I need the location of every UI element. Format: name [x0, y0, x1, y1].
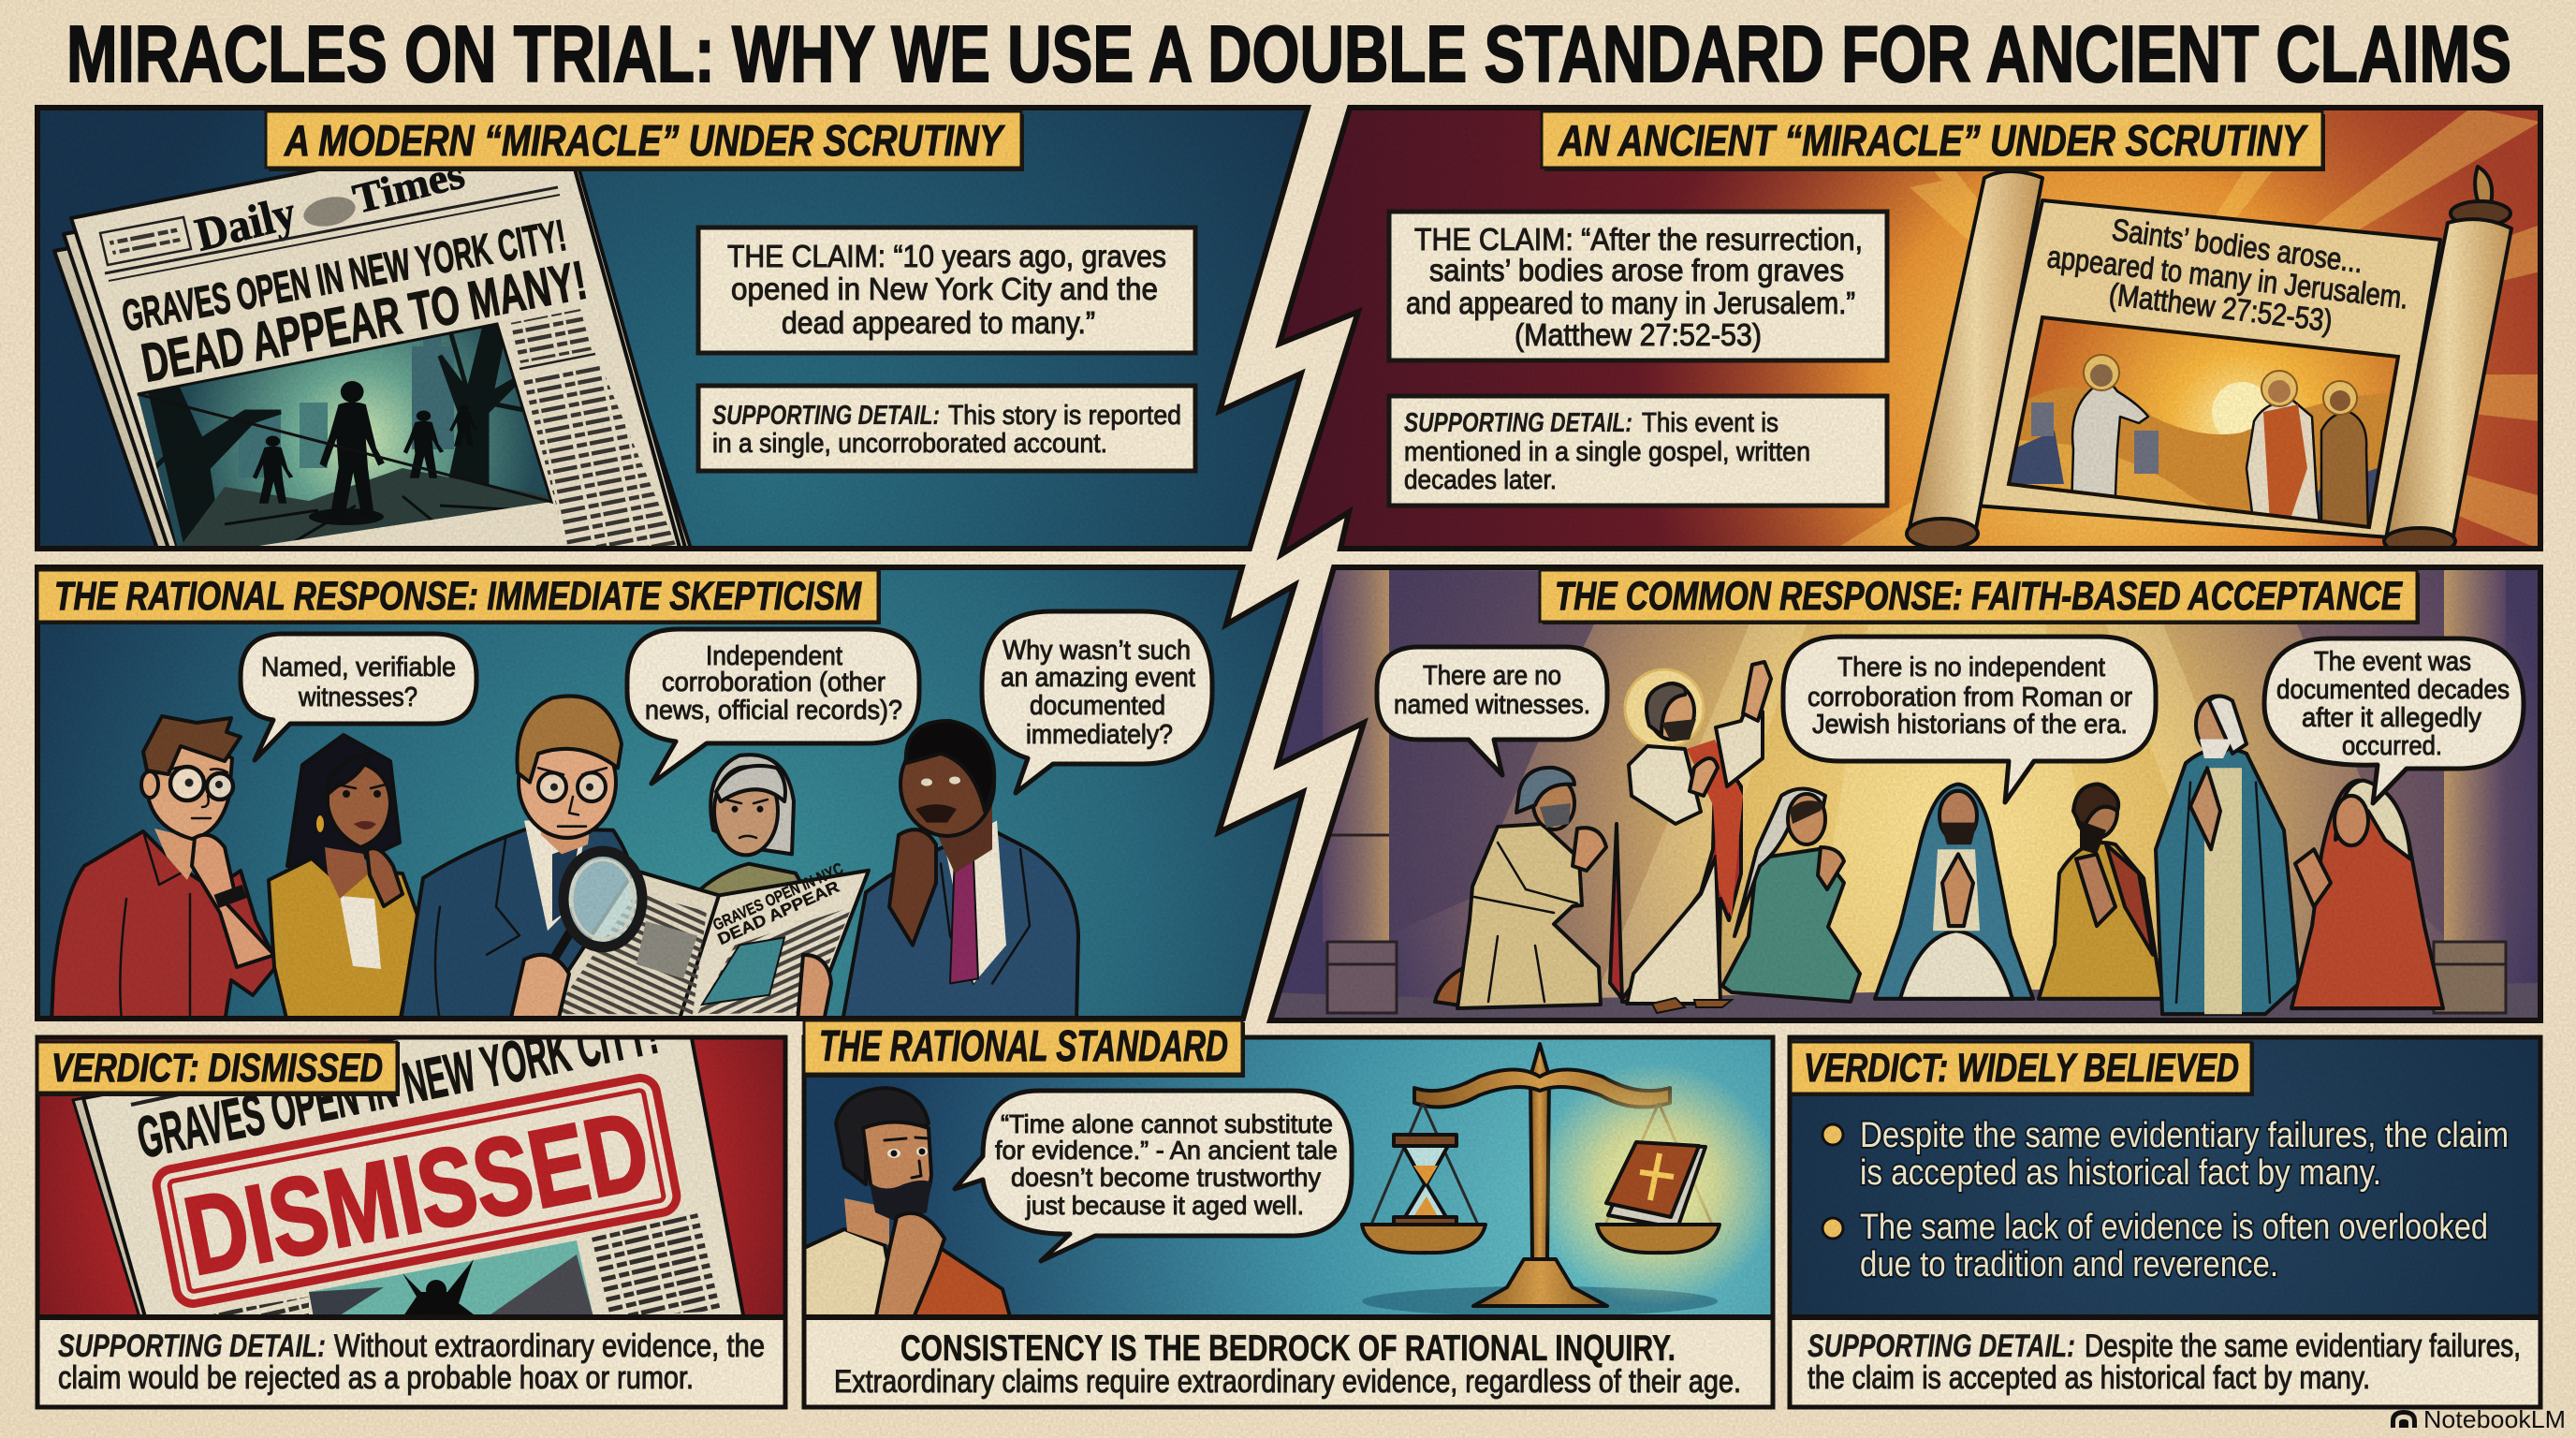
person: man in red shirt	[51, 716, 278, 1022]
heading: widely believed: VERDICT: WIDELY BELIEVED	[1804, 1046, 2239, 1091]
speech bubble: documented: an amazing event	[1001, 663, 1195, 693]
supporting detail: believed	[1808, 1328, 2521, 1396]
cave walls	[1385, 571, 1619, 936]
heading: modern miracle	[266, 111, 1024, 171]
claim box: modern: opened in New York City and the	[731, 271, 1158, 306]
heading: ancient miracle: AN ANCIENT “MIRACLE” UNDER SCRUTINY	[1558, 116, 2309, 165]
glowing book	[1535, 1063, 1778, 1306]
newspaper columns	[510, 309, 592, 363]
person: woman with grey hair	[683, 755, 814, 1021]
speech bubble: no corroboration: corroboration from Roman or	[1808, 682, 2132, 712]
person: man in dark suit	[842, 721, 1078, 1021]
figure: white robe	[2071, 383, 2148, 538]
supporting detail: ancient	[1389, 396, 1887, 506]
scroll text: Saints’ bodies arose...	[2110, 212, 2365, 279]
claim box: modern: THE CLAIM: “10 years ago, graves	[727, 239, 1166, 273]
heading: rational response	[37, 570, 881, 624]
newspaper headline: GRAVES OPEN IN NEW YORK CITY!	[118, 210, 570, 341]
panel: ancient miracle	[1280, 108, 2540, 580]
heading: rational standard: THE RATIONAL STANDARD	[819, 1021, 1228, 1070]
newspaper illustration: DEAD APPEAR TO MANY!	[137, 250, 592, 394]
supporting detail: believed: the claim is accepted as historical fact by many.	[1808, 1360, 2370, 1396]
heading: widely believed	[1791, 1042, 2254, 1096]
supporting detail: dismissed	[58, 1328, 765, 1396]
figure: standing man with halo	[1610, 662, 1771, 1013]
scroll illustration	[1591, 108, 2540, 580]
supporting detail: believed: SUPPORTING DETAIL:	[1808, 1328, 2075, 1364]
claim box: modern	[698, 227, 1195, 353]
speech bubble: time alone: doesn’t become trustworthy	[1011, 1163, 1321, 1192]
speech bubble: documented: documented	[1030, 691, 1165, 721]
speech bubble: corroboration: corroboration (other	[662, 668, 886, 697]
speech bubble: no witnesses: named witnesses.	[1394, 690, 1590, 720]
claim box: ancient: and appeared to many in Jerusalem.”	[1406, 286, 1855, 320]
speech bubble: time alone	[955, 1091, 1352, 1261]
left chains	[1368, 1103, 1481, 1231]
scale post	[1530, 1044, 1549, 1259]
speech bubble: no corroboration: There is no independent	[1837, 653, 2105, 682]
scroll text	[2045, 212, 2410, 338]
panel: rational response	[37, 567, 1303, 1022]
dismissed stamp: DISMISSED	[176, 1088, 659, 1299]
light rays	[1591, 599, 2321, 1007]
speech bubble: corroboration: Independent	[706, 641, 842, 671]
supporting detail: ancient: decades later.	[1404, 465, 1557, 495]
speech bubble: witnesses: Named, verifiable	[261, 653, 456, 682]
figure: woman in green	[1722, 788, 1860, 1002]
parchment	[1975, 200, 2440, 537]
speech bubble: documented	[982, 611, 1212, 793]
speech bubble: time alone: “Time alone cannot substitute	[1001, 1109, 1333, 1138]
dismissed newspaper: GRAVES OPEN IN NEW YORK CITY!	[132, 1002, 663, 1171]
heading: rational response: THE RATIONAL RESPONSE: IMMEDIATE SKEPTICISM	[54, 574, 862, 619]
speech bubble: decades later: after it allegedly	[2302, 703, 2481, 733]
bullet list: The same lack of evidence is often overlooked	[1860, 1208, 2488, 1247]
speech bubble: decades later: occurred.	[2342, 731, 2442, 761]
claim box: modern: dead appeared to many.”	[782, 305, 1095, 340]
open newspaper	[534, 858, 869, 1021]
floor	[1270, 983, 2540, 1022]
caption: consistency	[834, 1328, 1741, 1400]
figure: standing elder	[2156, 696, 2299, 1014]
claim box: ancient	[1389, 212, 1887, 360]
supporting detail: modern	[698, 386, 1195, 471]
panel: rational standard	[804, 1020, 1778, 1407]
figure: orange robe	[2247, 401, 2321, 543]
speech bubble: corroboration: news, official records)?	[645, 696, 902, 726]
dismissed newspaper	[73, 983, 744, 1320]
speech bubble: witnesses: witnesses?	[298, 682, 417, 712]
supporting detail: ancient: SUPPORTING DETAIL:	[1404, 408, 1632, 438]
supporting detail: dismissed: claim would be rejected as a probable hoax or rumor.	[58, 1360, 694, 1396]
person: man reading with magnifier	[401, 696, 646, 1021]
speech bubble: decades later: The event was	[2314, 647, 2471, 677]
figure: central man in blue veil	[1875, 785, 2033, 999]
panel: verdict dismissed	[37, 983, 785, 1407]
scales of justice	[1362, 1044, 1778, 1316]
NotebookLM logo: NotebookLM	[2423, 1405, 2566, 1433]
supporting detail: dismissed: SUPPORTING DETAIL:	[58, 1328, 326, 1364]
heading: verdict dismissed	[37, 1042, 400, 1096]
figure: brown robe	[2321, 412, 2368, 534]
speech bubble: no corroboration: Jewish historians of the era.	[1812, 710, 2128, 740]
caption: consistency: CONSISTENCY IS THE BEDROCK OF RATIONAL INQUIRY.	[900, 1328, 1676, 1369]
speech bubble: no witnesses: There are no	[1423, 661, 1561, 691]
speech bubble: corroboration	[627, 629, 919, 784]
heading: modern miracle: A MODERN “MIRACLE” UNDER SCRUTINY	[284, 116, 1006, 165]
speech bubble: time alone: just because it aged well.	[1025, 1191, 1304, 1220]
scroll left rod	[1907, 171, 2042, 580]
speech bubble: no witnesses	[1377, 647, 1607, 775]
claim box: ancient: (Matthew 27:52-53)	[1515, 317, 1762, 352]
supporting detail: ancient: This event is	[1642, 408, 1778, 438]
figure: man in yellow and red	[2039, 785, 2162, 999]
pillar left	[1323, 567, 1397, 1013]
masthead: Times	[348, 150, 469, 223]
scroll picture	[2009, 317, 2398, 543]
speech bubble: time alone: for evidence.” - An ancient tale	[995, 1136, 1338, 1165]
hourglass	[1394, 1135, 1456, 1228]
person: woman in yellow jacket	[269, 735, 419, 1022]
newspaper illustration	[52, 171, 693, 546]
supporting detail: modern: This story is reported	[948, 401, 1181, 431]
right chains	[1603, 1103, 1715, 1231]
bullet list: is accepted as historical fact by many.	[1860, 1153, 2381, 1193]
bullet list	[1822, 1116, 2509, 1284]
supporting detail: modern: SUPPORTING DETAIL:	[712, 401, 940, 431]
claim box: ancient: THE CLAIM: “After the resurrection,	[1414, 222, 1863, 257]
thinking man	[804, 1088, 1011, 1320]
supporting detail: ancient: mentioned in a single gospel, written	[1404, 437, 1810, 467]
heading: verdict dismissed: VERDICT: DISMISSED	[51, 1046, 383, 1091]
open newspaper: DEAD APPEAR	[715, 876, 842, 948]
supporting detail: modern: in a single, uncorroborated account.	[712, 429, 1107, 459]
inset picture	[309, 1240, 593, 1317]
masthead: Daily	[190, 185, 300, 261]
scroll text: (Matthew 27:52-53)	[2107, 276, 2334, 338]
bullet list: due to tradition and reverence.	[1860, 1245, 2278, 1284]
speech bubble: witnesses	[241, 634, 476, 760]
figure: woman in red	[2291, 781, 2443, 1008]
speech bubble: decades later	[2264, 638, 2524, 803]
magnifying glass	[510, 851, 642, 1021]
speech bubble: documented: immediately?	[1026, 720, 1173, 750]
scroll right rod	[2384, 167, 2511, 554]
masthead	[99, 171, 560, 282]
heading: rational standard	[804, 1020, 1245, 1078]
speech bubble: documented: Why wasn’t such	[1003, 636, 1191, 666]
heading: ancient miracle	[1542, 111, 2325, 171]
caption: consistency: Extraordinary claims require extraordinary evidence, regardless of their age.	[834, 1364, 1741, 1400]
panel: verdict widely believed	[1790, 1037, 2540, 1407]
supporting detail: dismissed: Without extraordinary evidence, the	[334, 1328, 765, 1364]
pillar right	[2434, 567, 2506, 1013]
figure: kneeling man	[1435, 768, 1606, 1008]
speech bubble: decades later: documented decades	[2276, 675, 2510, 705]
newspaper picture	[138, 318, 551, 550]
speech bubble: no corroboration	[1783, 637, 2156, 802]
scroll text: appeared to many in Jerusalem.	[2045, 239, 2410, 315]
claim box: ancient: saints’ bodies arose from graves	[1429, 253, 1844, 287]
open newspaper: GRAVES OPEN IN NYC	[710, 858, 846, 934]
panel: modern miracle	[37, 108, 1308, 554]
panel: common response	[1270, 567, 2540, 1022]
